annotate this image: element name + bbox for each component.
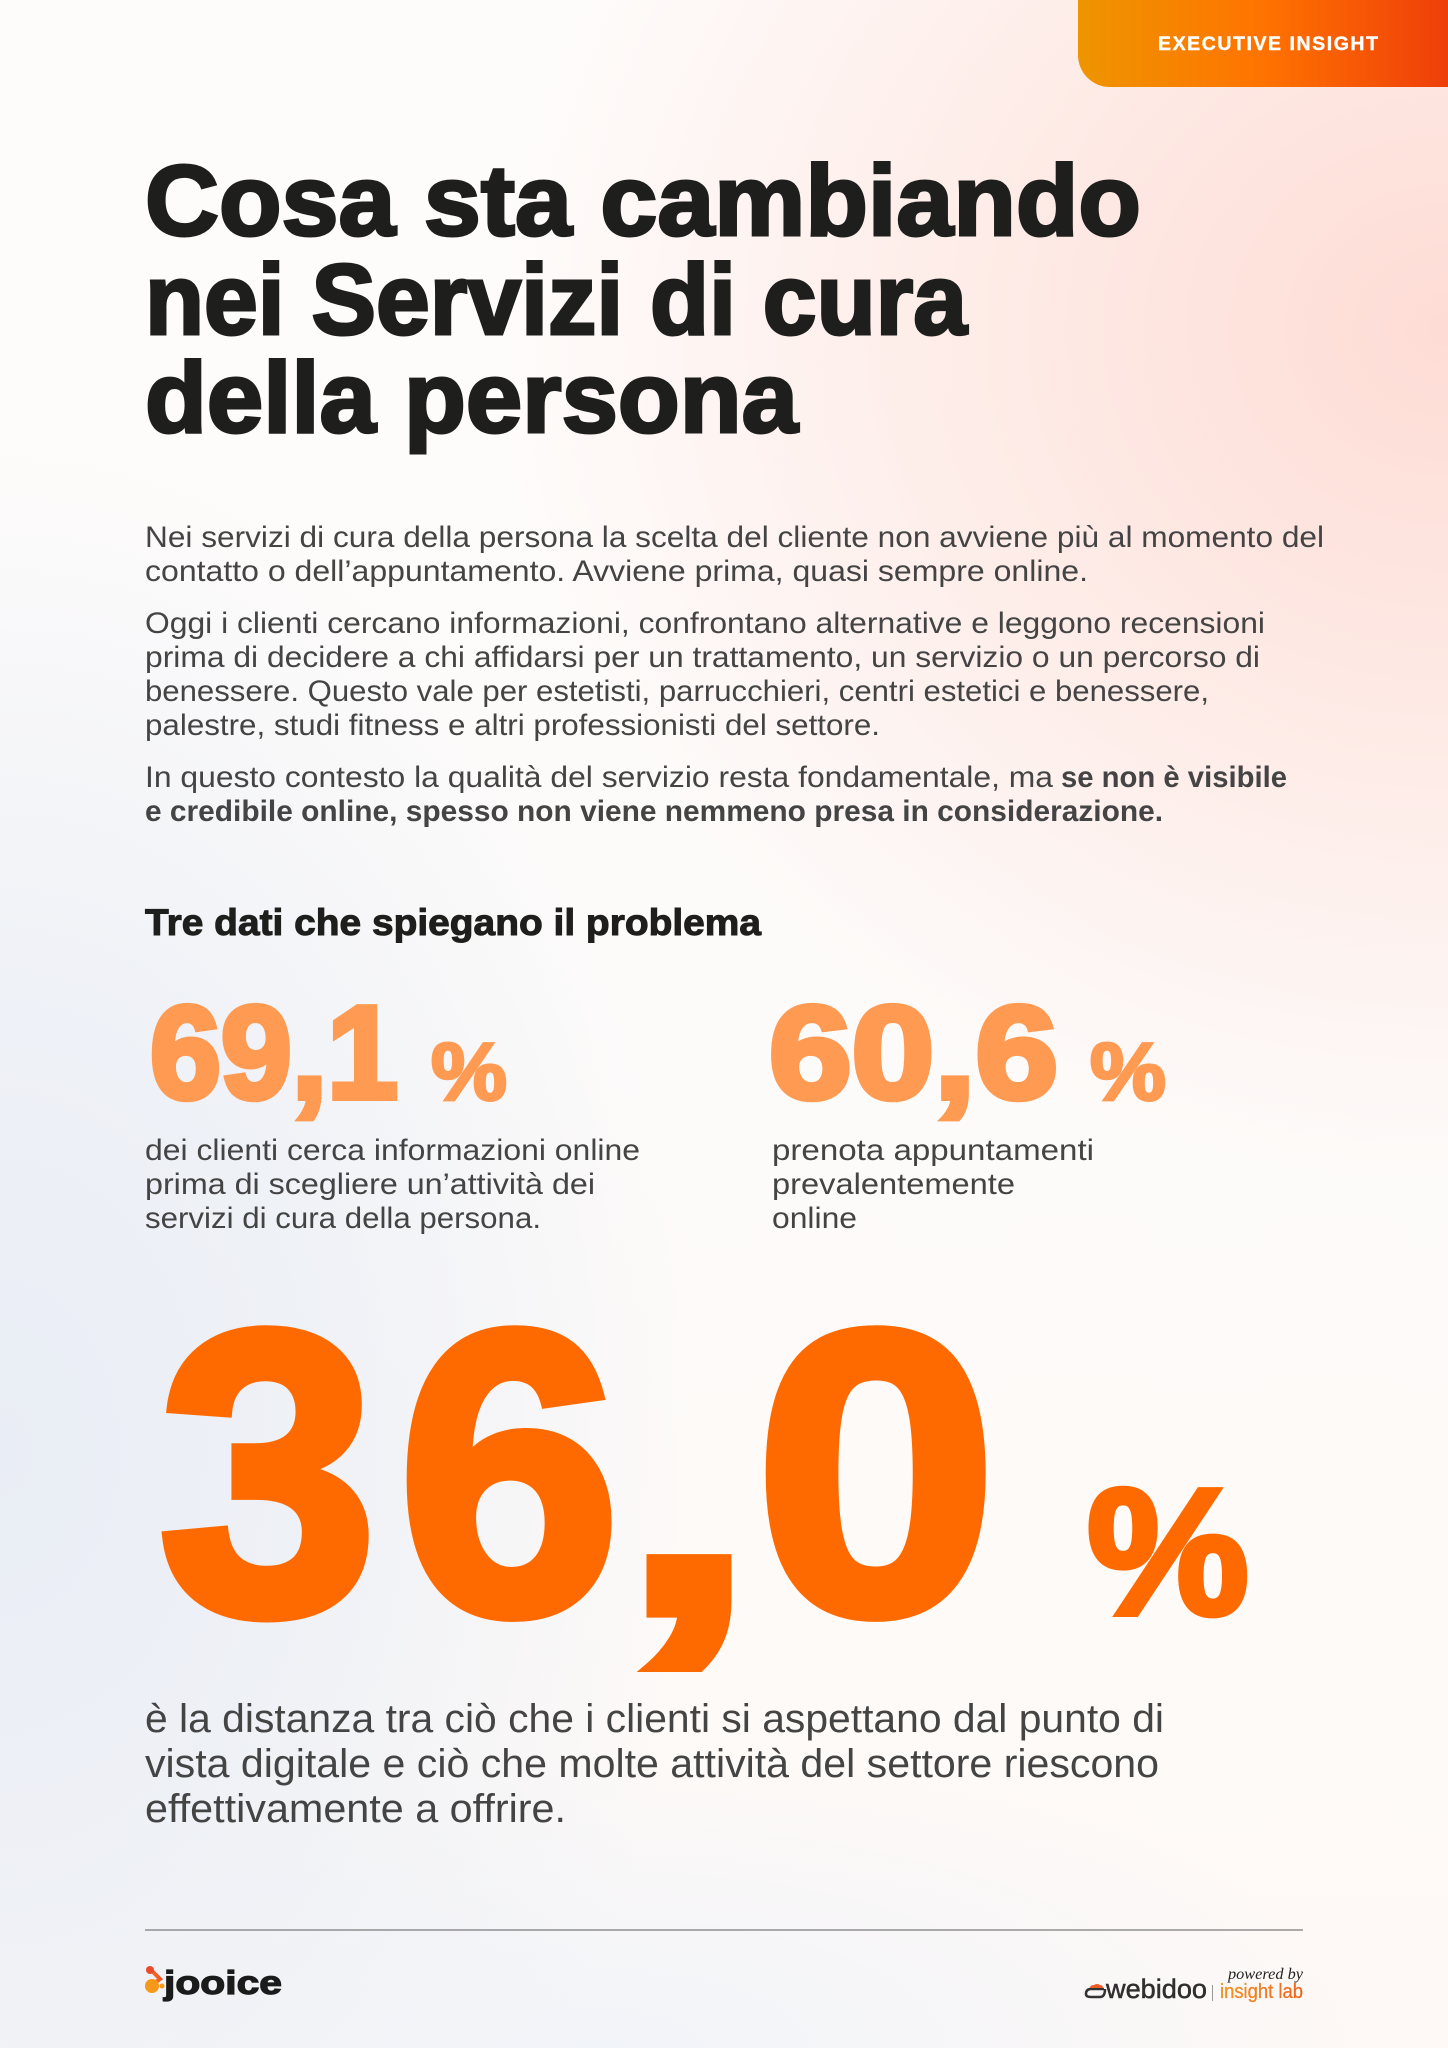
stat: 60,6% [769,979,1166,1235]
intro text block: palestre, studi fitness e altri professionisti del settore. [145,709,880,742]
stat: 69,1%: % [431,1027,507,1118]
badge: executive insight: EXECUTIVE INSIGHT [1158,33,1378,55]
intro text block: In questo contesto la qualità del servizio resta fondamentale, ma [145,761,1053,794]
intro text block: prima di decidere a chi affidarsi per un trattamento, un servizio o un percorso di [145,641,1260,674]
stat: 69,1%: dei clienti cerca informazioni online [145,1134,640,1167]
stat: 60,6%: online [772,1202,857,1235]
intro text block: se non è visibile [1061,761,1287,794]
stat: 36,0%: 0 [755,1249,997,1698]
stat: 60,6%: 60,6 [769,979,1058,1126]
title: Cosa sta cambiando [145,145,1141,257]
title: nei Servizi di cura [145,244,968,356]
intro text block: contatto o dell’appuntamento. Avviene prima, quasi sempre online. [145,555,1088,588]
badge: executive insight [1078,0,1448,87]
callout text: è la distanza tra ciò che i clienti si aspettano dal punto di [145,1697,1164,1741]
title: della persona [145,342,799,454]
callout text: effettivamente a offrire. [145,1787,566,1831]
stat: 36,0%: 3 [159,1249,377,1698]
callout text: vista digitale e ciò che molte attività del settore riescono [145,1742,1159,1786]
logo: webidoo insight lab: webidoo [1105,1974,1207,2004]
stat: 69,1% [145,979,640,1235]
section heading: Tre dati che spiegano il problema [145,902,761,943]
stat: 36,0%: % [1087,1452,1249,1653]
stat: 60,6%: prevalentemente [772,1168,1015,1201]
stat: 69,1%: 69,1 [150,979,398,1126]
stat: 60,6%: % [1090,1027,1166,1118]
intro text block [145,521,1324,828]
stat: 69,1%: servizi di cura della persona. [145,1202,541,1235]
stat: 60,6%: prenota appuntamenti [772,1134,1094,1167]
logo: jooice: jooice [163,1964,282,2001]
logo: webidoo insight lab: powered by [1227,1966,1303,1983]
logo: webidoo insight lab [1086,1966,1303,2004]
logo: jooice [145,1964,282,2001]
stat: 36,0%: , [620,1294,757,1687]
intro text block: e credibile online, spesso non viene nemmeno presa in considerazione. [145,795,1163,828]
title [145,145,1141,454]
logo: webidoo insight lab: insight lab [1220,1981,1303,2003]
callout text [145,1697,1164,1831]
intro text block: benessere. Questo vale per estetisti, parrucchieri, centri estetici e benessere, [145,675,1209,708]
stat: 36,0%: 6 [398,1249,620,1698]
intro text block: Nei servizi di cura della persona la scelta del cliente non avviene più al momento del [145,521,1324,554]
stat: 36,0% [159,1249,1249,1698]
intro text block: Oggi i clienti cercano informazioni, confrontano alternative e leggono recensioni [145,607,1265,640]
stat: 69,1%: prima di scegliere un’attività dei [145,1168,595,1201]
